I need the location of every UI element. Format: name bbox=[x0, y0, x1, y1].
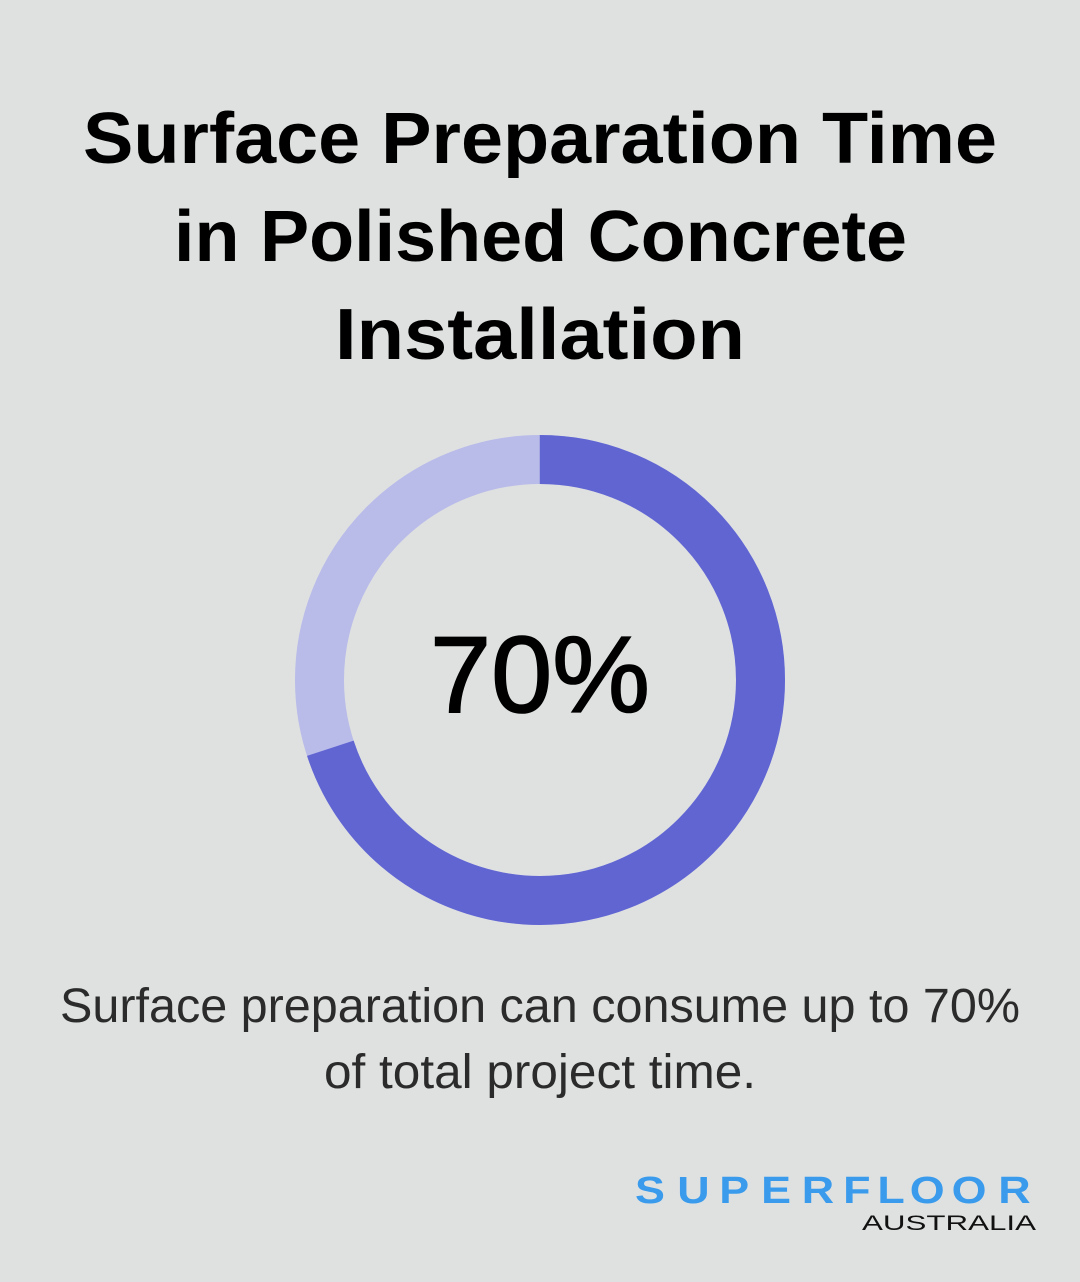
logo: Superfloor Australia: AUSTRALIA bbox=[862, 1212, 1036, 1235]
logo: Superfloor Australia bbox=[635, 1168, 1036, 1235]
logo: Superfloor Australia: SUPERFLOOR bbox=[635, 1168, 1031, 1211]
title: Surface Preparation Time bbox=[83, 99, 997, 179]
description text: of total project time. bbox=[324, 1046, 756, 1099]
title: in Polished Concrete bbox=[174, 197, 907, 277]
donut chart: 70 percent bbox=[320, 460, 760, 900]
description text bbox=[60, 980, 1020, 1099]
description text: Surface preparation can consume up to 70% bbox=[60, 980, 1020, 1033]
title: Installation bbox=[335, 295, 745, 375]
title bbox=[83, 99, 997, 375]
donut value label: 70% bbox=[430, 614, 650, 736]
